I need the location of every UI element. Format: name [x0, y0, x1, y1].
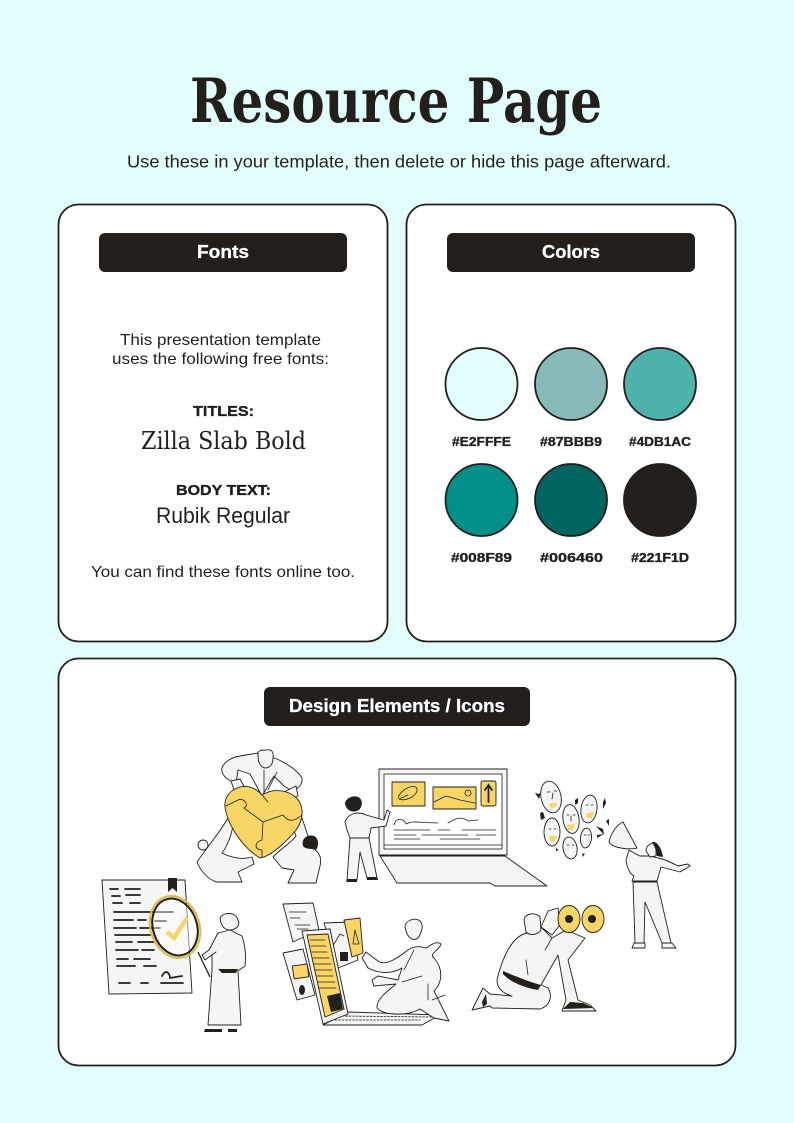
swatch: 008F89: #008F89 [451, 550, 512, 565]
text: intro: This presentation template [120, 332, 321, 349]
icon: kneeling man with documents and laptop [283, 903, 449, 1025]
text: titles label: TITLES: [193, 403, 254, 420]
text: title font name: Zilla Slab Bold [141, 427, 306, 455]
heading: design elements [264, 687, 530, 726]
swatch: E2FFFE: #E2FFFE [452, 434, 511, 449]
swatch: 4DB1AC [624, 348, 696, 449]
icon: people holding puzzle heart [197, 750, 321, 883]
panel: colors [406, 204, 736, 642]
text: body label: BODY TEXT: [176, 482, 271, 499]
heading: fonts: Fonts [197, 242, 249, 262]
text: intro [112, 332, 329, 368]
heading: fonts [99, 233, 347, 272]
swatch: 008F89 [446, 464, 518, 565]
subtitle: Use these in your template, then delete or hide this page afterward. [127, 152, 671, 172]
text: closing note: You can find these fonts online too. [91, 564, 355, 581]
title: Resource Page [190, 66, 602, 137]
swatch: E2FFFE [446, 348, 518, 449]
swatch: 4DB1AC: #4DB1AC [629, 434, 692, 449]
icon: woman presenting at laptop [345, 769, 547, 886]
text: intro: uses the following free fonts: [112, 351, 329, 368]
icon: kneeling man with binoculars [472, 906, 604, 1011]
icon: woman with megaphone and faces [535, 779, 690, 948]
swatch: 006460: #006460 [540, 550, 603, 565]
panel: fonts [58, 204, 388, 642]
swatch: 221F1D [624, 464, 696, 565]
icon: man inspecting document with magnifier [102, 878, 246, 1032]
swatch: 221F1D: #221F1D [631, 550, 689, 565]
panel: design elements [58, 658, 736, 1066]
heading: colors [447, 233, 695, 272]
swatch: 87BBB9: #87BBB9 [540, 434, 602, 449]
swatch: 006460 [535, 464, 607, 565]
heading: design elements: Design Elements / Icons [289, 696, 505, 716]
text: body font name: Rubik Regular [156, 503, 290, 528]
heading: colors: Colors [542, 242, 600, 262]
swatch: 87BBB9 [535, 348, 607, 449]
